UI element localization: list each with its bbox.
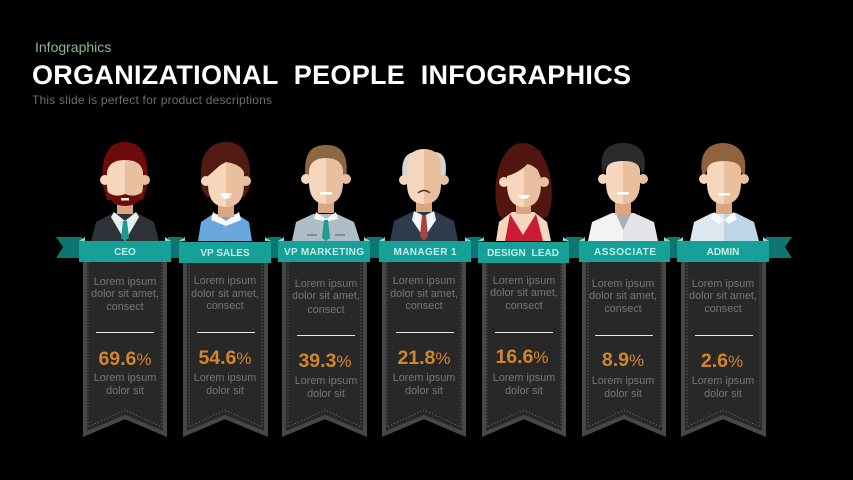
description: Lorem ipsum (692, 278, 754, 290)
caption (295, 375, 357, 400)
caption (194, 372, 256, 397)
value: 39.3% (298, 350, 352, 372)
description: dolor sit amet, (191, 288, 259, 300)
caption (94, 372, 156, 397)
eyebrow label: Infographics (35, 39, 111, 55)
description: dolor sit amet, (589, 290, 657, 302)
caption (592, 375, 654, 400)
caption: dolor sit (307, 388, 345, 400)
description (191, 275, 259, 312)
description: dolor sit amet, (490, 287, 558, 299)
person: Manager 1 (390, 149, 458, 241)
description: dolor sit amet, (292, 290, 360, 302)
ribbon: Design Lead: DESIGN LEAD (487, 248, 559, 259)
description: Lorem ipsum (295, 278, 357, 290)
caption: dolor sit (206, 385, 244, 397)
description: consect (405, 300, 443, 312)
ribbon: Associate: ASSOCIATE (594, 247, 656, 258)
panel: CEO (79, 237, 171, 434)
caption: dolor sit (704, 388, 742, 400)
panel: Manager 1 (379, 237, 471, 434)
value: 2.6% (701, 350, 743, 372)
ribbon: Associate (579, 241, 670, 262)
ribbon: Manager 1 (379, 241, 471, 262)
description (689, 278, 757, 315)
ribbon back band (56, 237, 792, 258)
value: 21.8% (397, 347, 451, 369)
panel: Design Lead (478, 237, 569, 434)
caption: dolor sit (405, 385, 443, 397)
description: consect (106, 301, 144, 313)
description: dolor sit amet, (390, 288, 458, 300)
description: dolor sit amet, (689, 290, 757, 302)
description: Lorem ipsum (194, 275, 256, 287)
caption: dolor sit (106, 385, 144, 397)
caption: dolor sit (604, 388, 642, 400)
description: dolor sit amet, (91, 288, 159, 300)
description: Lorem ipsum (94, 276, 156, 288)
caption: Lorem ipsum (194, 372, 256, 384)
caption: Lorem ipsum (692, 375, 754, 387)
ribbon: VP Sales (179, 242, 271, 263)
person: VP Sales (198, 142, 252, 241)
person: CEO (91, 142, 159, 241)
caption (393, 372, 455, 397)
caption: Lorem ipsum (295, 375, 357, 387)
panel: Associate (579, 237, 670, 434)
description: consect (704, 303, 742, 315)
description (390, 275, 458, 312)
description: consect (307, 304, 345, 316)
description: consect (505, 300, 543, 312)
ribbon: Design Lead (478, 242, 569, 263)
caption (493, 372, 555, 397)
ribbon: CEO: CEO (114, 247, 136, 258)
caption: dolor sit (505, 385, 543, 397)
caption: Lorem ipsum (94, 372, 156, 384)
ribbon: Manager 1: MANAGER 1 (394, 247, 457, 258)
value: 69.6% (98, 348, 152, 370)
ribbon: Admin: ADMIN (707, 247, 739, 258)
caption (692, 375, 754, 400)
description (490, 275, 558, 312)
person: Design Lead (495, 143, 552, 241)
panel: Admin (677, 237, 769, 434)
ribbon: VP Sales: VP SALES (200, 248, 250, 259)
description (91, 276, 159, 313)
description (589, 278, 657, 315)
description: consect (604, 303, 642, 315)
ribbon: Admin (677, 241, 769, 262)
caption: Lorem ipsum (493, 372, 555, 384)
subtitle: This slide is perfect for product descriptions (32, 93, 272, 107)
ribbon: VP Marketing: VP MARKETING (284, 247, 364, 258)
caption: Lorem ipsum (393, 372, 455, 384)
description: consect (206, 300, 244, 312)
description: Lorem ipsum (493, 275, 555, 287)
description: Lorem ipsum (592, 278, 654, 290)
caption: Lorem ipsum (592, 375, 654, 387)
panel: VP Marketing (278, 237, 370, 434)
ribbon: VP Marketing (278, 241, 370, 262)
person: VP Marketing (292, 145, 360, 241)
value: 16.6% (495, 346, 549, 368)
title: ORGANIZATIONAL PEOPLE INFOGRAPHICS (32, 60, 631, 90)
panel: VP Sales (179, 237, 271, 434)
description (292, 278, 360, 316)
ribbon: CEO (79, 241, 171, 262)
person: Associate (588, 143, 658, 241)
description: Lorem ipsum (393, 275, 455, 287)
value: 54.6% (198, 347, 252, 369)
person: Admin (690, 143, 759, 241)
value: 8.9% (602, 349, 644, 371)
